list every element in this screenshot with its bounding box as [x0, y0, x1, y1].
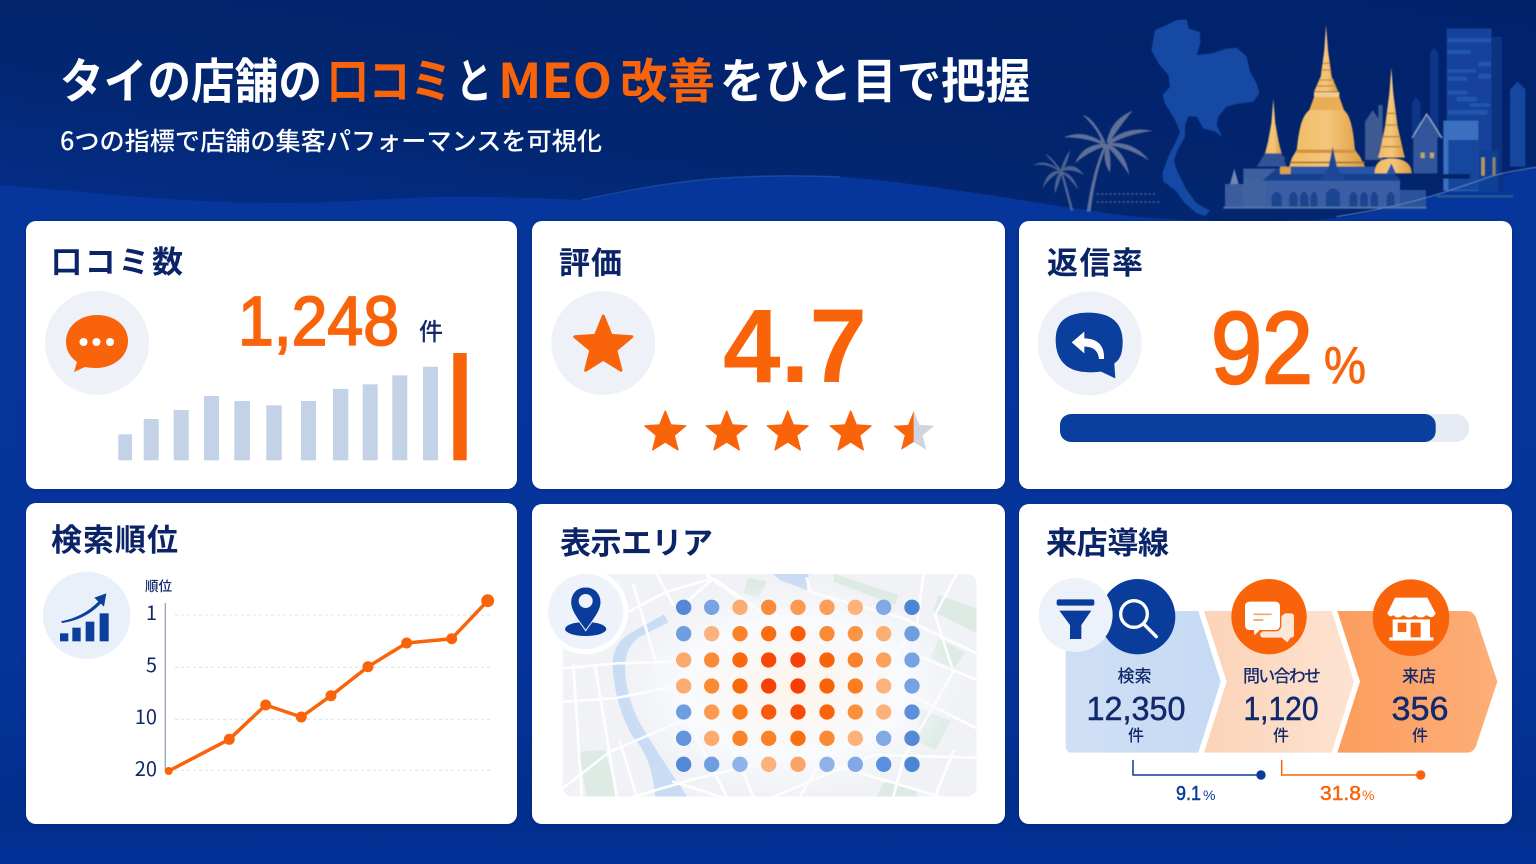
icon: city skyline [1365, 28, 1525, 198]
label: 問い合わせ 1,120件: 件 [1273, 722, 1289, 746]
label: 来店 356件: 件 [1412, 722, 1428, 746]
panel: 口コミ数 [26, 221, 517, 489]
progress bar [1060, 414, 1469, 442]
icon: rising chart [43, 572, 130, 659]
icon: left golden spire [1265, 99, 1282, 153]
step: 問い合わせ [1204, 611, 1354, 753]
title: と [456, 42, 492, 112]
unit: 件: 件 [419, 312, 443, 347]
title: をひと目で把握 [720, 42, 1030, 112]
heading: 来店導線: 来店導線 [1046, 518, 1169, 563]
line chart: 5 [146, 649, 157, 678]
heading: 口コミ数: 口コミ数 [51, 237, 183, 282]
conversion rate: 31.8% [1282, 760, 1425, 805]
title: 口コミ [327, 42, 452, 112]
icon: search [1100, 579, 1175, 654]
title: タイの店舗の [60, 42, 322, 112]
label: 検索 12,350件: 検索 [1118, 662, 1152, 687]
icon: star [551, 291, 655, 395]
icon: chat [1231, 579, 1307, 654]
heading: 評価: 評価 [559, 238, 622, 283]
label: 問い合わせ 1,120件: 問い合わせ [1243, 662, 1321, 687]
step: 検索 [1066, 611, 1221, 753]
icon: right golden spire [1375, 68, 1412, 173]
conversion rate: 31.8%: 31.8 [1320, 783, 1361, 805]
street map [563, 574, 977, 797]
icon: reply bubble [1038, 291, 1142, 395]
subtitle: 6つの指標で店舗の集客パフォーマンスを可視化 [60, 122, 602, 158]
star rating [645, 411, 934, 450]
line chart [135, 594, 494, 782]
heading: 表示エリア: 表示エリア [560, 518, 713, 563]
value: 1,248: 1,248 [238, 282, 399, 360]
conversion rate: 9.1% [1133, 760, 1266, 805]
title [60, 42, 1030, 112]
unit: %: % [1324, 337, 1366, 395]
step: 来店 [1337, 611, 1497, 753]
panel: 表示エリア [532, 504, 1005, 824]
label: 来店 356件: 356 [1392, 690, 1448, 727]
icon: location pin [543, 569, 628, 654]
value: 92: 92 [1211, 291, 1313, 405]
header illustration: Thailand skyline [1033, 19, 1536, 217]
map with heat dots [543, 569, 977, 797]
panel: 来店導線 [1019, 504, 1512, 824]
title: 改善 [620, 42, 715, 112]
conversion rate: 9.1%: % [1203, 787, 1215, 803]
label: 来店 356件: 来店 [1402, 662, 1436, 687]
label: 検索 12,350件 [1086, 662, 1186, 746]
funnel diagram [1039, 578, 1497, 753]
axis label: 順位: 順位 [145, 575, 172, 595]
bar chart [118, 353, 467, 460]
icon: store [1373, 579, 1449, 656]
icon: palm trees [1033, 111, 1160, 212]
title: MEO [498, 42, 612, 112]
icon: funnel [1039, 578, 1113, 652]
panel: 評価 [532, 221, 1005, 489]
conversion rate: 31.8%: % [1362, 787, 1374, 803]
panel: 返信率 [1019, 221, 1512, 489]
panel: 検索順位 [26, 503, 517, 824]
line chart: 10 [135, 701, 157, 730]
conversion rate: 9.1%: 9.1 [1176, 783, 1201, 805]
icon: Thailand map [1151, 19, 1259, 216]
icon: speech bubble [45, 291, 149, 395]
label: 問い合わせ 1,120件: 1,120 [1244, 690, 1318, 727]
value: 4.7: 4.7 [723, 288, 867, 405]
icon: palace base [1223, 153, 1427, 209]
line chart: 1 [146, 597, 157, 626]
header band [0, 0, 1536, 221]
line chart: 20 [135, 753, 157, 782]
label: 来店 356件 [1392, 662, 1448, 746]
heading: 検索順位: 検索順位 [51, 515, 178, 560]
heading: 返信率: 返信率 [1047, 238, 1143, 283]
label: 検索 12,350件: 12,350 [1086, 690, 1186, 727]
heat dots [676, 600, 920, 772]
icon: main golden stupa [1280, 25, 1375, 180]
label: 検索 12,350件: 件 [1128, 722, 1144, 746]
label: 問い合わせ 1,120件 [1243, 662, 1321, 746]
